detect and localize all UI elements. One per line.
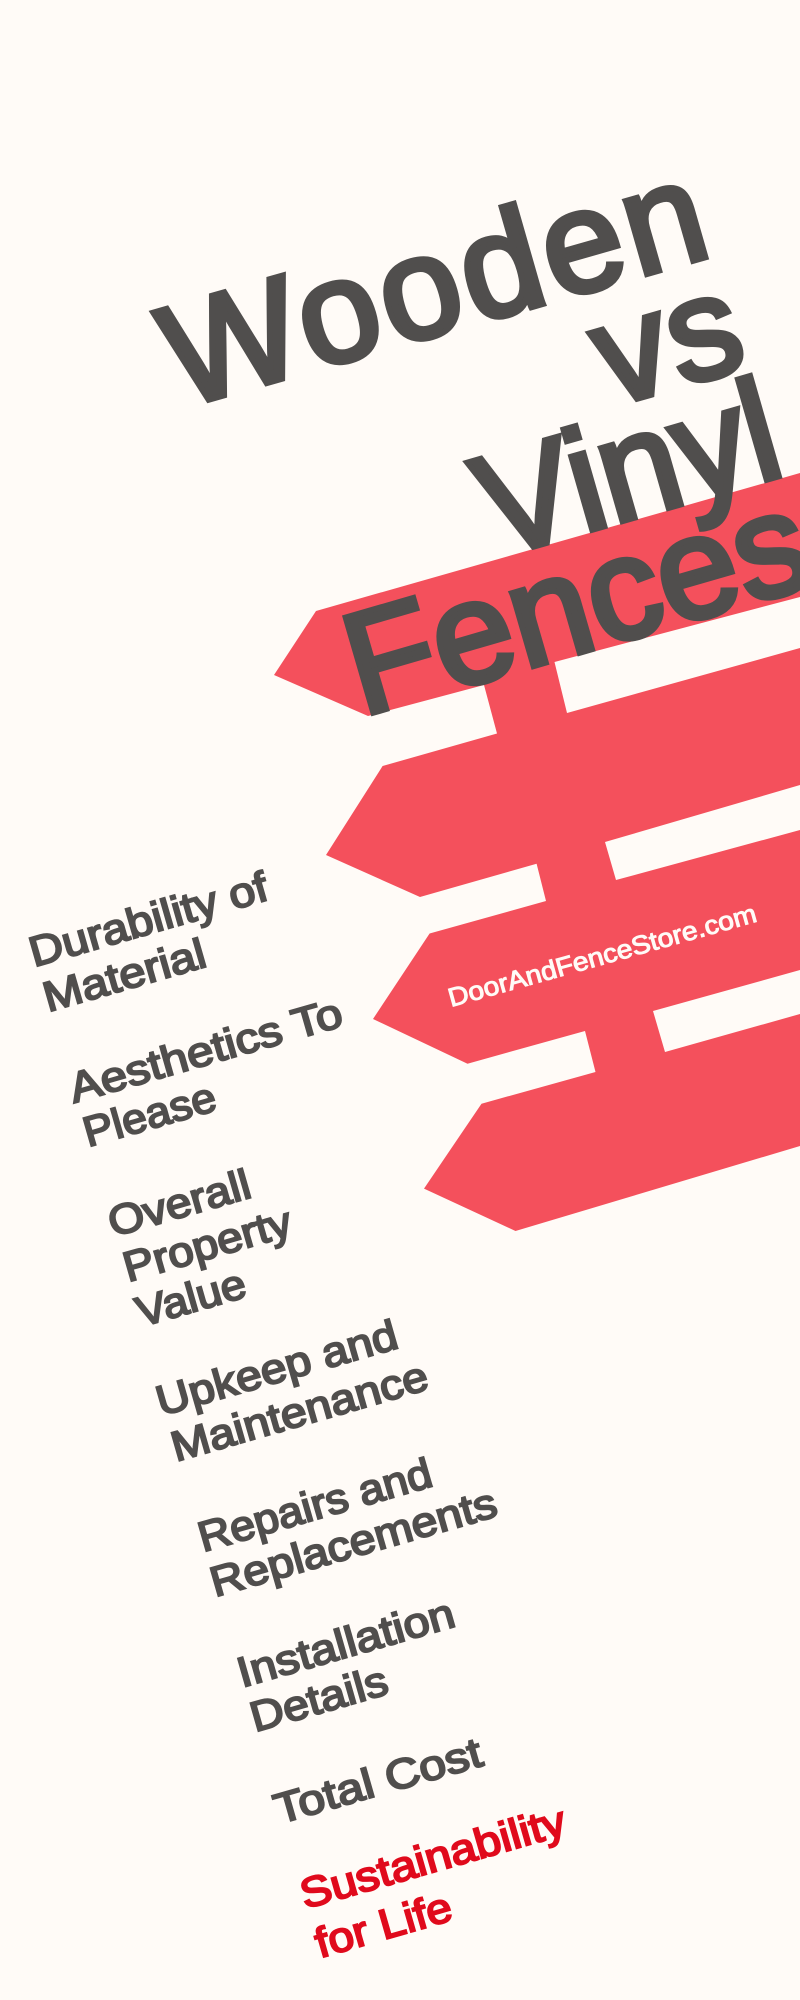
item: Durability of Material — [24, 863, 273, 1021]
item: Repairs and Replacements: Replacements — [205, 1479, 502, 1606]
title line: Wooden: Wooden — [144, 130, 723, 438]
item: Overall Property Value: Value — [131, 1260, 251, 1336]
item: Aesthetics To Please: Please — [78, 1073, 221, 1156]
item: Aesthetics To Please: Aesthetics To — [64, 989, 348, 1112]
title line: vs: vs — [574, 241, 759, 436]
website label: DoorAndFenceStore.com — [445, 898, 760, 1013]
item: Overall Property Value: Overall — [103, 1160, 256, 1246]
list of comparison factors — [24, 863, 502, 1833]
item: Installation Details — [232, 1589, 460, 1741]
item: Upkeep and Maintenance: Maintenance — [166, 1352, 433, 1470]
item: Durability of Material: Durability of — [24, 863, 273, 976]
item: Installation Details: Installation — [232, 1589, 460, 1696]
item: Upkeep and Maintenance — [151, 1311, 433, 1470]
item: Aesthetics To Please — [64, 989, 348, 1156]
item: Repairs and Replacements — [193, 1449, 502, 1606]
title — [144, 130, 800, 746]
item: Sustainability for Life (highlighted): for Life — [310, 1883, 457, 1967]
item: Overall Property Value — [103, 1160, 297, 1336]
item: Durability of Material: Material — [38, 929, 211, 1021]
item: Sustainability for Life (highlighted) — [295, 1797, 571, 1967]
icon: red signpost with four arrow boards — [274, 473, 800, 1231]
item: Sustainability for Life (highlighted): Sustainability — [295, 1797, 571, 1918]
item: Repairs and Replacements: Repairs and — [193, 1449, 437, 1561]
item: Installation Details: Details — [245, 1657, 393, 1741]
title line: Vinyl: Vinyl — [458, 349, 797, 588]
item: Total Cost: Total Cost — [269, 1728, 488, 1833]
item: Overall Property Value: Property — [118, 1198, 297, 1291]
item: Upkeep and Maintenance: Upkeep and — [151, 1311, 403, 1425]
